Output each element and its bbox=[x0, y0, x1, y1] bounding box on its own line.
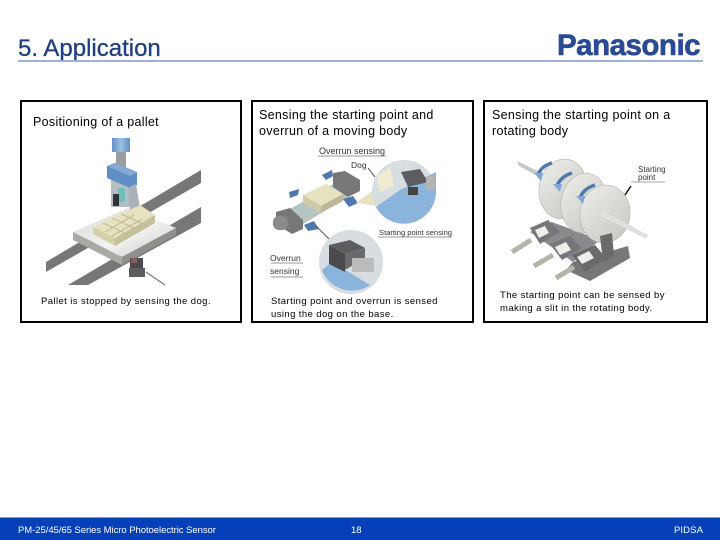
caption: rotating body bbox=[500, 290, 665, 314]
footer: product name: PM-25/45/65 Series Micro Photoelectric Sensor bbox=[18, 525, 216, 536]
panel: moving body bbox=[251, 100, 474, 323]
heading: moving body: overrun of a moving body bbox=[259, 124, 408, 138]
caption: pallet: Pallet is stopped by sensing the dog. bbox=[41, 296, 211, 307]
illustration: rotating discs with sensors: point bbox=[638, 173, 656, 182]
panel: rotating body bbox=[483, 100, 708, 323]
illustration: moving body with sensors: Dog bbox=[351, 160, 367, 170]
title rule bbox=[18, 60, 703, 62]
footer: page number: 18 bbox=[351, 525, 361, 536]
logo: Panasonic: Panasonic bbox=[557, 29, 700, 62]
caption: rotating body: The starting point can be sensed by bbox=[500, 290, 665, 301]
caption: moving body: using the dog on the base. bbox=[271, 309, 394, 320]
heading: rotating body: rotating body bbox=[492, 124, 568, 138]
caption: moving body bbox=[271, 296, 438, 320]
heading: positioning of a pallet: Positioning of a pallet bbox=[33, 115, 159, 129]
illustration: rotating discs with sensors: Starting bbox=[638, 165, 666, 174]
heading: moving body bbox=[259, 108, 434, 138]
heading: rotating body bbox=[492, 108, 670, 138]
heading: rotating body: Sensing the starting point on a bbox=[492, 108, 670, 122]
illustration: moving body with sensors: sensing bbox=[270, 266, 300, 276]
callout circle: overrun sensing bbox=[372, 160, 436, 224]
caption: moving body: Starting point and overrun is sensed bbox=[271, 296, 438, 307]
callout circle: starting point sensing bbox=[319, 230, 383, 294]
heading: moving body: Sensing the starting point and bbox=[259, 108, 434, 122]
footer: division: PIDSA bbox=[674, 525, 703, 536]
illustration: moving body with sensors: Overrun sensing bbox=[319, 146, 385, 156]
illustration: moving body with sensors: Overrun bbox=[270, 253, 301, 263]
title: 5. Application bbox=[18, 35, 161, 62]
footer bar bbox=[0, 517, 720, 540]
panel: positioning of a pallet bbox=[20, 100, 242, 323]
illustration: moving body with sensors: Starting point sensing bbox=[379, 228, 452, 237]
caption: rotating body: making a slit in the rotating body. bbox=[500, 303, 653, 314]
